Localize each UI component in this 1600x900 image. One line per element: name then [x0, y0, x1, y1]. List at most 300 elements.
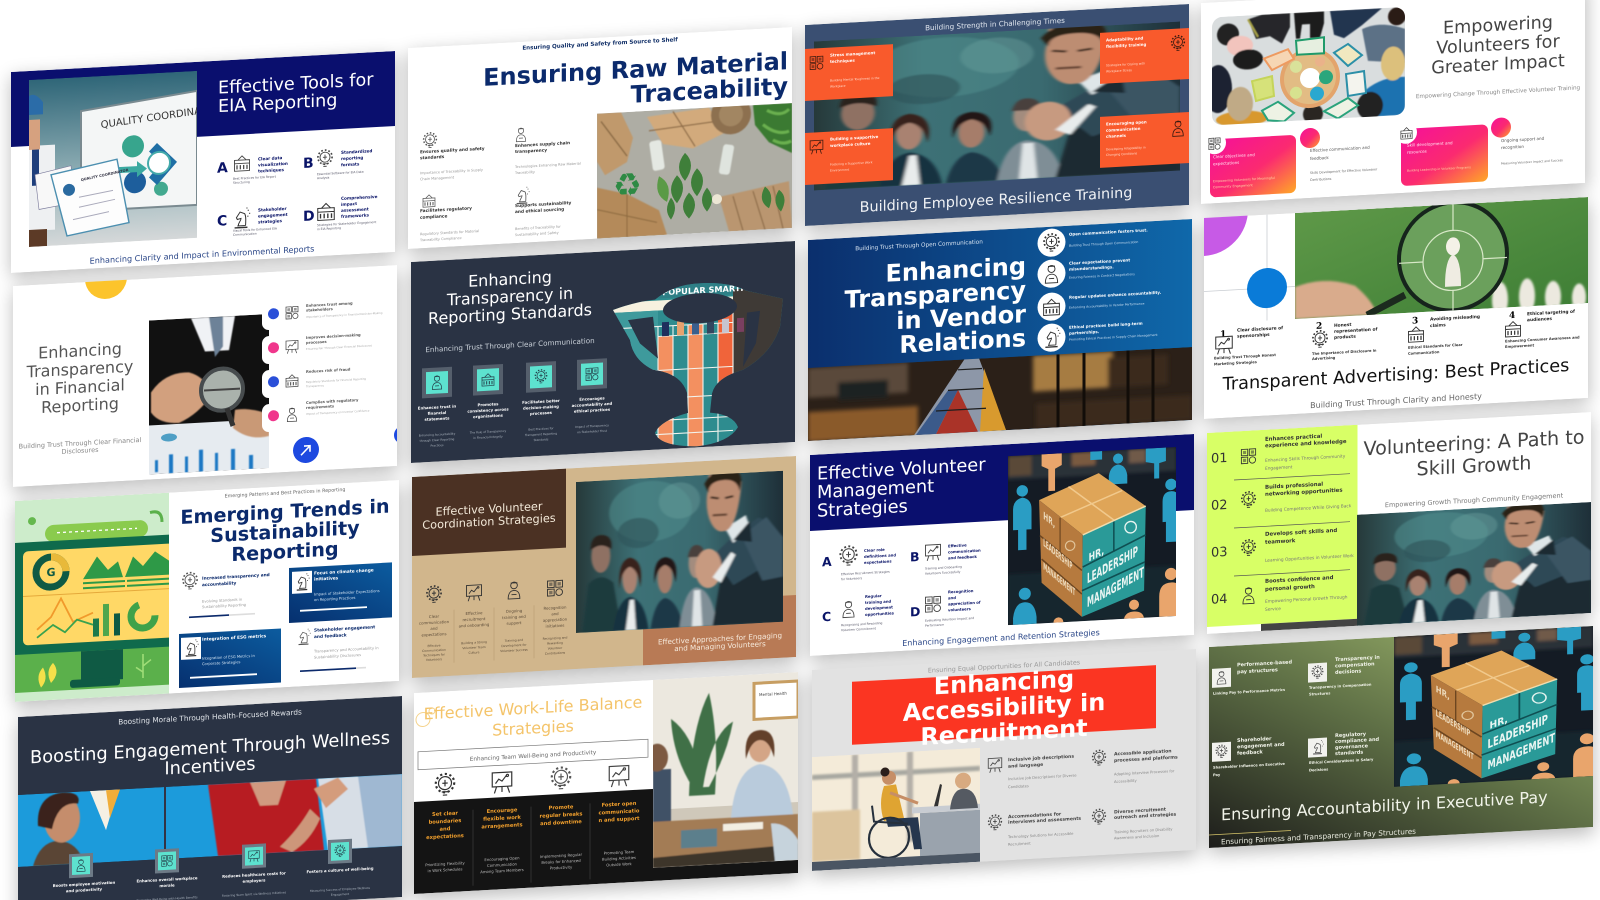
title: Enhancing: [468, 267, 552, 291]
panel: Effective Volunteer Coordination Strategies: [412, 456, 796, 678]
title: Boosting Engagement Through Wellness: [30, 728, 390, 768]
point 2: 2: [1316, 322, 1322, 332]
tagline: Emerging Patterns and Best Practices in Reporting: [225, 487, 345, 500]
photo: magnifier over pawns: [1295, 197, 1588, 319]
item 1: Practices: [430, 443, 444, 448]
item 3: [222, 842, 287, 898]
column 1: and: [430, 626, 438, 631]
item C: strategies: [258, 218, 282, 224]
callout box: and Managing Volunteers: [674, 639, 766, 653]
title: Building Employee Resilience Training: [860, 185, 1132, 216]
item 01: [1211, 432, 1347, 475]
point 4: audiences: [1527, 316, 1552, 323]
point 2: Advertising: [1312, 356, 1336, 361]
item B: Standardized: [341, 148, 372, 155]
items: [988, 746, 1178, 848]
chart: trophy-shaped smartphone table: [613, 283, 783, 446]
item 2: [514, 125, 581, 175]
column 2: Among Team Members: [480, 867, 524, 874]
item 1: statements: [425, 415, 450, 422]
item 01: Enhancing Skills Through Community: [1265, 453, 1346, 464]
item: ongoing support: recognition: [1501, 144, 1524, 150]
card: supportive culture: [805, 128, 893, 185]
point 2: The Importance of Disclosure in: [1312, 349, 1377, 356]
card: skill development: Skill development and: [1407, 140, 1453, 148]
photo: raw materials: ♻: [613, 165, 642, 205]
column 3: Training and: [504, 638, 523, 643]
point 1: Clear disclosure of: [1237, 325, 1283, 334]
point 3: 3: [1412, 316, 1418, 327]
point 3: Ethical Standards for Clear: [1408, 343, 1463, 350]
item 2: Promotes: [478, 401, 499, 407]
point 4: 4: [1509, 311, 1515, 321]
column 3: regular breaks: [540, 811, 582, 820]
item 1: Ensures quality and safety: [420, 146, 485, 155]
card: climate change: Impact of Stakeholder Expectations: [314, 589, 380, 597]
column 4: Outside Work: [606, 861, 633, 867]
tagline: Building Trust Through Open Communication: [855, 239, 983, 252]
item 2: organizations: [473, 413, 504, 419]
item 1: Enhancing Accountability: [419, 432, 456, 438]
item 02: [1211, 480, 1352, 517]
title: Transparency: [845, 276, 1026, 314]
item 1: [1212, 659, 1292, 696]
tagline: Building Strength in Challenging Times: [925, 16, 1065, 32]
card: clear objectives: Community Engagement: [1213, 183, 1254, 189]
item 4: Engagement: [331, 892, 350, 897]
panel: Enhancing Accessibility in Recruitment: [812, 649, 1196, 871]
photo: magnifying glass on reports: [149, 314, 269, 474]
panel: Building Employee Resilience Training: [805, 4, 1189, 226]
card: stress management: Workplace: [830, 84, 846, 89]
subtitle: Ensuring Fairness and Transparency in Pay Structures: [1221, 827, 1416, 846]
item 3: Regulatory Standards for Material: [420, 229, 479, 236]
benefit list: [268, 300, 383, 423]
item D: impact: [341, 201, 357, 207]
item B: formats: [341, 161, 360, 167]
point 4: Empowerment: [1505, 343, 1534, 349]
column 2: Building a Strong: [461, 640, 487, 645]
column 1: expectations: [426, 833, 464, 841]
item D: Evaluating Volunteer Impact and: [925, 616, 974, 623]
item 1: standards: [420, 154, 445, 161]
item 03: [1211, 527, 1354, 567]
item C: opportunities: [865, 610, 895, 617]
item 3: Traceability Compliance: [419, 236, 462, 242]
item B: [304, 149, 372, 180]
title: Relations: [899, 324, 1026, 359]
card: clear objectives: Empowering Volunteers for Meaningful: [1213, 176, 1275, 183]
item: communication: Contributions: [1310, 177, 1332, 182]
card: ESG metrics: Integration of ESG metrics: [202, 633, 267, 643]
photo: pointing manager: [1357, 498, 1591, 626]
card: climate change: [289, 562, 392, 623]
column 2: Communication: [487, 861, 518, 868]
item 01: Enhances practical: [1265, 434, 1322, 443]
row 1: Importance of Transparency in Financial Decision-Making: [306, 311, 383, 319]
item 3: compliance: [420, 213, 447, 221]
card: climate change: Focus on climate change: [314, 567, 374, 577]
card: stress management: techniques: [830, 58, 855, 64]
item 3: [419, 192, 479, 242]
item 02: Builds professional: [1265, 482, 1323, 491]
column 2: Encouraging Open: [484, 855, 520, 862]
card: ESG metrics: [179, 628, 281, 688]
column 2: Volunteer Team: [462, 645, 486, 650]
item C: [822, 592, 895, 633]
item 4: and ethical sourcing: [515, 206, 564, 215]
item 4: compliance and: [1335, 737, 1380, 745]
row 1: [268, 302, 382, 320]
point 2: [1312, 319, 1377, 361]
item A: definitions and: [864, 552, 896, 559]
decorative blue circle: [1247, 267, 1287, 309]
item 03: teamwork: [1265, 538, 1296, 546]
card: stress management: Building Mental Toughness in the: [830, 76, 880, 83]
point 4: Promoting Ethical Practices in Supply Chain Management: [1069, 333, 1158, 342]
card: adaptability: Workplace Stress: [1106, 68, 1132, 74]
title: Skill Growth: [1417, 451, 1531, 481]
item 3: engagement and: [1237, 742, 1285, 750]
item C: development: [865, 604, 893, 611]
column 1: expectations: [421, 631, 447, 637]
panel: Boosting Engagement Through Wellness Incentives: [18, 696, 402, 900]
item D: D: [910, 604, 920, 620]
item B: B: [303, 155, 314, 172]
point 4: Ethical practices build long-term: [1069, 321, 1143, 330]
items A to D: [217, 147, 378, 238]
title: Volunteering: A Path to: [1363, 425, 1585, 460]
item A: expectations: [864, 558, 892, 565]
item 1: through Clear Reporting: [420, 437, 455, 443]
row 2: processes: [306, 340, 328, 345]
item C: Stakeholder: [258, 206, 287, 212]
card: stakeholder engagement: [299, 624, 379, 672]
title: EIA Reporting: [218, 91, 337, 117]
item 4: Awareness and Inclusion: [1114, 834, 1160, 840]
item 1: Boosts employee motivation: [53, 880, 115, 888]
item 04: personal growth: [1265, 584, 1315, 593]
illustration: green dashboard monitor: G: [46, 566, 56, 579]
item 2: Accessibility: [1114, 779, 1137, 784]
item B: communication: [948, 548, 981, 554]
teal icon row: [53, 838, 374, 900]
item 4: [306, 838, 374, 898]
item A: visualization: [258, 161, 288, 167]
panel: Enhancing Transparency in Reporting Standards: [411, 241, 795, 467]
item B: and feedback: [948, 554, 977, 560]
item 4: Training Recruiters on Disability: [1113, 827, 1173, 835]
card: open communication: Changing Conditions: [1106, 151, 1138, 157]
item 04: 04: [1211, 592, 1228, 608]
title: Effective Tools for: [218, 70, 374, 99]
card: open communication: [1100, 112, 1189, 168]
card: stakeholder engagement: Sustainability Disclosures: [314, 653, 361, 660]
card: ESG metrics: Integration of ESG Metrics in: [202, 654, 255, 661]
item 3: Shareholder Influence on Executive: [1213, 762, 1285, 770]
title: Enhancing: [886, 252, 1026, 288]
column 1: Effective: [427, 643, 441, 648]
item 3: Facilitates better: [522, 398, 560, 405]
decorative purple circle: [1160, 166, 1248, 258]
card: climate change: initiatives: [314, 575, 339, 583]
item: communication: [1300, 124, 1378, 183]
item A: Effective Recruitment Strategies: [841, 570, 890, 576]
card: increased transparency: [183, 568, 270, 618]
photo: pointing manager: [576, 465, 783, 633]
item 2: consistency across: [467, 406, 509, 414]
item 2: morale: [159, 882, 175, 888]
item 4: Decisions: [1309, 767, 1328, 773]
photo: pointing manager: [814, 16, 1180, 191]
point 4: partnerships.: [1069, 329, 1100, 336]
item 4: [1308, 731, 1380, 773]
item B: B: [910, 549, 920, 565]
item 4: ethical practices: [574, 407, 611, 414]
item 4: [572, 358, 613, 435]
item 3: [522, 361, 560, 443]
column 4: initiatives: [546, 623, 564, 629]
item 3: Pay: [1213, 773, 1221, 777]
point 2: [1038, 255, 1135, 288]
item 02: Building Competence While Giving Back: [1265, 503, 1352, 514]
item B: Essential Software for EIA Data: [317, 170, 364, 176]
row 4: Impact of Transparency on Investor Confidence: [306, 408, 370, 416]
card: stress management: Stress management: [830, 50, 875, 58]
item 4: Impact of Transparency: [575, 423, 609, 429]
icon row: [436, 764, 629, 797]
item A: for Volunteers: [841, 576, 862, 581]
item 1: financial: [428, 410, 446, 416]
item D: [910, 588, 981, 629]
item 04: Empowering Personal Growth Through: [1265, 594, 1348, 605]
card: adaptability: Strategies for Coping with: [1106, 61, 1145, 68]
column 4: [598, 801, 640, 868]
item D: in EIA Reporting: [317, 226, 341, 231]
item 2: [1308, 655, 1380, 697]
item C: Regular: [865, 593, 882, 599]
row 3: [268, 368, 366, 388]
item B: reporting: [341, 155, 363, 161]
item A: Clear data: [258, 155, 283, 161]
point 1: sponsorships: [1237, 332, 1270, 340]
column 3: support: [507, 620, 522, 626]
card: clear objectives: expectations: [1213, 160, 1239, 166]
column 3: [500, 581, 528, 653]
item 1: pay structures: [1237, 667, 1278, 675]
title: Reporting Standards: [428, 300, 592, 328]
item 01: Engagement: [1265, 464, 1293, 472]
item 3: Shareholder: [1237, 736, 1272, 744]
row 3: Regulatory Standards for Financial Reporting: [306, 377, 366, 384]
item D: Comprehensive: [341, 194, 378, 201]
subtitle: Empowering Change Through Effective Volunteer Training: [1416, 85, 1581, 100]
item 2: The Role of Transparency: [469, 429, 506, 435]
title: Ensuring Accountability in Executive Pay: [1221, 787, 1548, 824]
item C: C: [217, 213, 227, 230]
item 1: Candidates: [1008, 784, 1029, 789]
panel: Ensuring Raw Material Traceability: [408, 27, 792, 249]
column 1: in Work Schedules: [428, 866, 462, 873]
numbered list: [1211, 432, 1354, 616]
item 4: Fosters a culture of well-being: [306, 866, 374, 874]
card: open communication: Encouraging open: [1106, 119, 1147, 127]
column 1: Communication: [422, 648, 446, 653]
title: Enhancing: [38, 339, 122, 363]
title: Enhancing: [934, 665, 1074, 700]
panel: Ensuring Accountability in Executive Pay: [1209, 626, 1600, 848]
point 3: [1408, 313, 1480, 356]
item 1: Linking Pay to Performance Metrics: [1213, 688, 1285, 696]
title: Emerging Trends in: [180, 495, 390, 529]
item 1: Importance of Traceability in Supply: [420, 168, 483, 175]
item 4: outreach and strategies: [1114, 812, 1176, 821]
item 03: 03: [1211, 545, 1228, 561]
title: Transparency: [26, 357, 133, 382]
title: Recruitment: [920, 714, 1088, 751]
row 1: Enhances trust among: [306, 301, 353, 308]
icon: blue arrow button: [293, 436, 319, 464]
item 4: standards: [1335, 750, 1363, 757]
column 2: Encourage: [487, 807, 518, 815]
point 3: Communication: [1408, 350, 1440, 356]
item 2: Structures: [1309, 691, 1330, 697]
row 4: Complies with regulatory: [306, 398, 359, 405]
point 1: [1214, 325, 1283, 366]
column 4: Building Activities: [602, 855, 636, 862]
item 01: 01: [1211, 451, 1228, 467]
column 4: Volunteer: [548, 646, 563, 651]
row 3: Reduces risk of fraud: [306, 368, 351, 374]
illustration: wheelchair user at desk: [812, 748, 980, 871]
column 3: Development for: [501, 643, 527, 648]
item D: frameworks: [341, 212, 369, 219]
item 3: [989, 810, 1081, 848]
item 04: Service: [1265, 606, 1281, 613]
subtitle box: Enhancing Team Well-Being and Productivity: [470, 750, 597, 763]
item: communication: Skills Development for Effective Volunteer: [1310, 167, 1378, 175]
column 4: Contributions: [545, 651, 566, 656]
item 03: Learning Opportunities in Volunteer Work: [1265, 553, 1354, 564]
card: supportive culture: Building a supportive: [830, 134, 879, 142]
item 2: Adapting Interview Processes for: [1114, 769, 1175, 776]
panel: Effective Volunteer Management Strategies: [810, 434, 1194, 656]
photo: volunteer circle from above: [1212, 7, 1405, 125]
item 4: on Stakeholder Trust: [577, 429, 608, 434]
point 1: 1: [1220, 330, 1226, 340]
item 1: [53, 852, 115, 900]
decorative rings: [416, 708, 435, 727]
tagline: Boosting Morale Through Health-Focused Rewards: [118, 707, 302, 727]
item B: [910, 542, 981, 577]
title: Volunteers for: [1436, 32, 1560, 59]
card: adaptability: Adaptability and: [1106, 35, 1144, 43]
card: stress management: [805, 44, 893, 101]
panel: Volunteering: A Path to Skill Growth: [1207, 412, 1591, 634]
item B: Effective: [948, 542, 967, 548]
item A: A: [822, 554, 832, 569]
point 2: Ensuring Fairness in Contract Negotiations: [1069, 272, 1135, 280]
items A to D: [822, 539, 981, 633]
row 4: requirements: [306, 404, 335, 410]
item 3: Accommodations for: [1008, 811, 1062, 820]
item 1: Enhances trust in: [418, 404, 456, 411]
item 3: Facilitates regulatory: [420, 205, 472, 214]
point 4: [1038, 318, 1158, 352]
item D: Recognition: [948, 588, 974, 594]
items: [419, 125, 581, 242]
title: Greater Impact: [1431, 51, 1565, 79]
photo: leadership cube: [1394, 626, 1600, 791]
title: in Vendor: [896, 300, 1026, 335]
column 3: and downtime: [540, 819, 582, 827]
item C: Visual Tools for Enhanced EIA: [233, 226, 278, 233]
photo: quality coordinator certificate: QUALITY COORDINATOR: [100, 103, 222, 131]
card: skill development: [1395, 117, 1488, 186]
item 4: Measuring Success of Employee Wellness: [310, 886, 371, 893]
panel: Enhancing Transparency in Vendor Relations: [808, 219, 1192, 442]
title: Effective Volunteer: [436, 500, 543, 519]
decorative blue circle: [394, 428, 397, 442]
photo: meeting with colleagues: Mental Health: [759, 691, 787, 697]
column 2: [480, 807, 524, 874]
item D: volunteers: [948, 606, 972, 612]
column 4: Promoting Team: [604, 849, 635, 856]
column 3: Ongoing: [506, 608, 523, 614]
subtitle: Enhancing Trust Through Clear Communication: [425, 336, 595, 354]
row 3: Transparency: [305, 383, 324, 388]
item 1: Inclusive Job Descriptions for Diverse: [1008, 773, 1077, 781]
column 2: [459, 584, 490, 655]
column 1: Techniques for: [422, 652, 446, 658]
item 4: [1093, 805, 1176, 842]
card: supportive culture: Fostering a Supportive Work: [830, 160, 873, 167]
point 3: Avoiding misleading: [1430, 314, 1480, 323]
point 1: [1038, 223, 1148, 257]
item 2: Accessible application: [1114, 748, 1172, 757]
item B: Volunteers Successfully: [925, 570, 961, 576]
card: increased transparency: accountability: [202, 580, 237, 588]
item 1: [988, 753, 1077, 790]
item 3: processes: [530, 410, 553, 416]
item C: C: [822, 609, 831, 624]
column 2: and onboarding: [459, 622, 490, 628]
item 01: experience and knowledge: [1265, 439, 1347, 449]
subtitle: Enhancing Clarity and Impact in Environmental Reports: [90, 243, 314, 266]
column 3: [540, 804, 583, 871]
item A: Best Practices for EIA Report: [233, 174, 277, 181]
title: Strategies: [492, 716, 574, 740]
item 1: Chain Management: [420, 175, 455, 181]
item 3: feedback: [1237, 749, 1263, 757]
tagline: Ensuring Equal Opportunities for All Candidates: [928, 658, 1081, 675]
photo: team in bright office: [18, 774, 402, 867]
point 4: [1505, 307, 1580, 349]
item 1: Performance-based: [1237, 659, 1292, 668]
photo: meeting with colleagues: [653, 672, 798, 868]
photo: raw materials: [597, 103, 792, 238]
column 3: Promote: [549, 804, 574, 812]
item 2: Traceability: [514, 170, 535, 175]
item 2: in Financial Integrity: [473, 434, 503, 440]
panel: Enhancing Transparency in Financial Reporting: [13, 265, 397, 487]
item 3: Standards: [534, 437, 549, 442]
column 4: n and support: [598, 816, 640, 824]
panel: Effective Work-Life Balance Strategies: [414, 672, 798, 894]
title: in Financial: [35, 375, 125, 399]
item D: and: [948, 595, 956, 600]
photo: quality coordinator certificate: [29, 71, 197, 247]
